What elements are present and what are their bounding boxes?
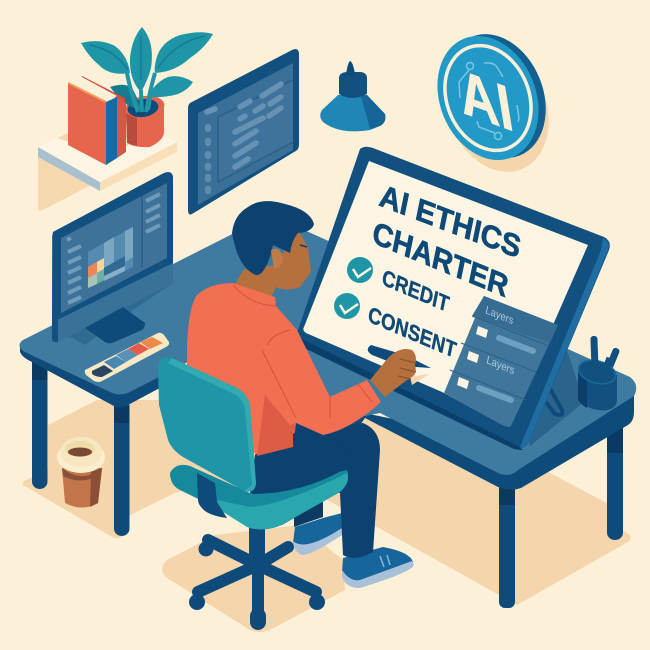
floor shadow under chair xyxy=(162,525,345,632)
item: CONSENT: CONSENT xyxy=(366,301,459,363)
screen xyxy=(303,161,588,426)
drawing tablet xyxy=(297,147,610,450)
shirt xyxy=(187,283,381,456)
AI letters: AI xyxy=(453,54,518,146)
label: Layers: Layers xyxy=(484,304,515,328)
plant xyxy=(81,27,213,147)
colour grid xyxy=(88,227,133,288)
backrest xyxy=(158,358,256,492)
tablet hand shadow xyxy=(410,374,429,385)
forearm hand xyxy=(370,349,416,397)
shirt hem xyxy=(257,400,293,456)
stylus xyxy=(368,345,431,368)
person xyxy=(187,201,431,588)
chair xyxy=(158,358,352,530)
pot xyxy=(124,93,166,147)
desk xyxy=(19,218,636,490)
seat xyxy=(170,465,348,530)
check icon: credit xyxy=(347,257,373,283)
shelf xyxy=(38,120,177,191)
leaves xyxy=(81,27,213,112)
desk lamp shade xyxy=(320,61,385,131)
stand xyxy=(85,307,145,343)
AI wall badge xyxy=(420,19,567,188)
screen xyxy=(61,183,167,313)
ear xyxy=(271,249,283,269)
heading: CHARTER: CHARTER xyxy=(370,215,511,304)
thigh over seat xyxy=(252,430,352,494)
layers panel xyxy=(444,296,558,427)
wall monitor xyxy=(188,49,299,214)
floor shadow under desk xyxy=(22,400,631,605)
far shoe xyxy=(293,513,342,552)
coffee cup xyxy=(57,437,105,508)
office chair base xyxy=(189,515,325,630)
books xyxy=(68,76,126,165)
label: Layers 2: Layers xyxy=(485,354,516,378)
neck and face xyxy=(235,230,311,300)
colour palette xyxy=(85,333,169,382)
heading: AI ETHICS: AI ETHICS xyxy=(377,178,524,265)
tablet body xyxy=(297,147,610,448)
code lines xyxy=(207,84,281,167)
desk legs xyxy=(32,360,623,608)
circuit traces xyxy=(459,62,519,140)
trousers and shin xyxy=(250,412,380,558)
check icon: consent xyxy=(334,293,360,319)
shadow behind tablet xyxy=(522,347,584,446)
pen holder xyxy=(576,336,620,410)
desk monitor xyxy=(52,172,173,345)
tablet stand xyxy=(546,385,562,415)
item: CREDIT: CREDIT xyxy=(380,264,452,317)
near shoe xyxy=(342,547,414,588)
hair xyxy=(232,201,314,275)
wall shadow under shelf xyxy=(38,155,95,211)
